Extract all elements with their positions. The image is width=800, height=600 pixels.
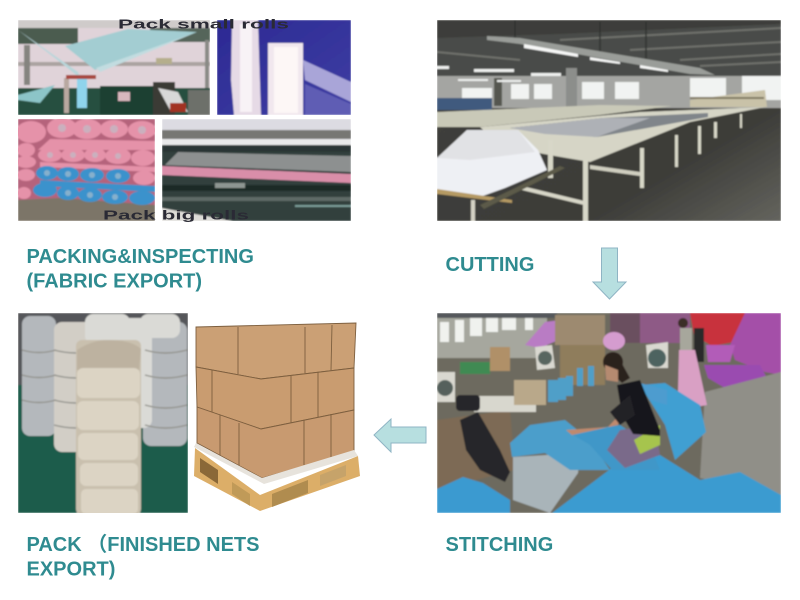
photo: small white rolls on purple	[217, 20, 351, 115]
box stack	[196, 323, 356, 478]
pallet	[194, 448, 360, 511]
arrow: stitching left to pack	[374, 419, 426, 452]
panel: packing and inspecting fabric export	[16, 16, 351, 222]
label: packing and inspecting: (FABRIC EXPORT)	[26, 270, 202, 292]
label: stitching: STITCHING	[446, 534, 553, 556]
photo: cutting room with long tables	[437, 20, 781, 221]
photo: worker stitching blue nets	[437, 313, 781, 513]
label: cutting: CUTTING	[446, 254, 534, 276]
overlay caption: pack small rolls: Pack small rolls	[118, 16, 289, 32]
overlay caption: pack big rolls: Pack big rolls	[103, 208, 249, 222]
photo: stacked pink and blue rolls	[16, 118, 156, 221]
arrow: cutting down to stitching	[593, 248, 626, 299]
photo: pack bales of finished nets	[18, 313, 188, 515]
illustration: boxes on wooden pallet	[194, 323, 360, 511]
label: packing and inspecting: PACKING&INSPECTING	[26, 246, 254, 268]
photo: net rolling machine	[18, 20, 210, 115]
label: pack finished nets export: PACK （FINISHED NETS	[26, 534, 259, 556]
photo: big roll inspection machine	[162, 119, 351, 221]
label: pack finished nets export: EXPORT)	[26, 558, 115, 580]
